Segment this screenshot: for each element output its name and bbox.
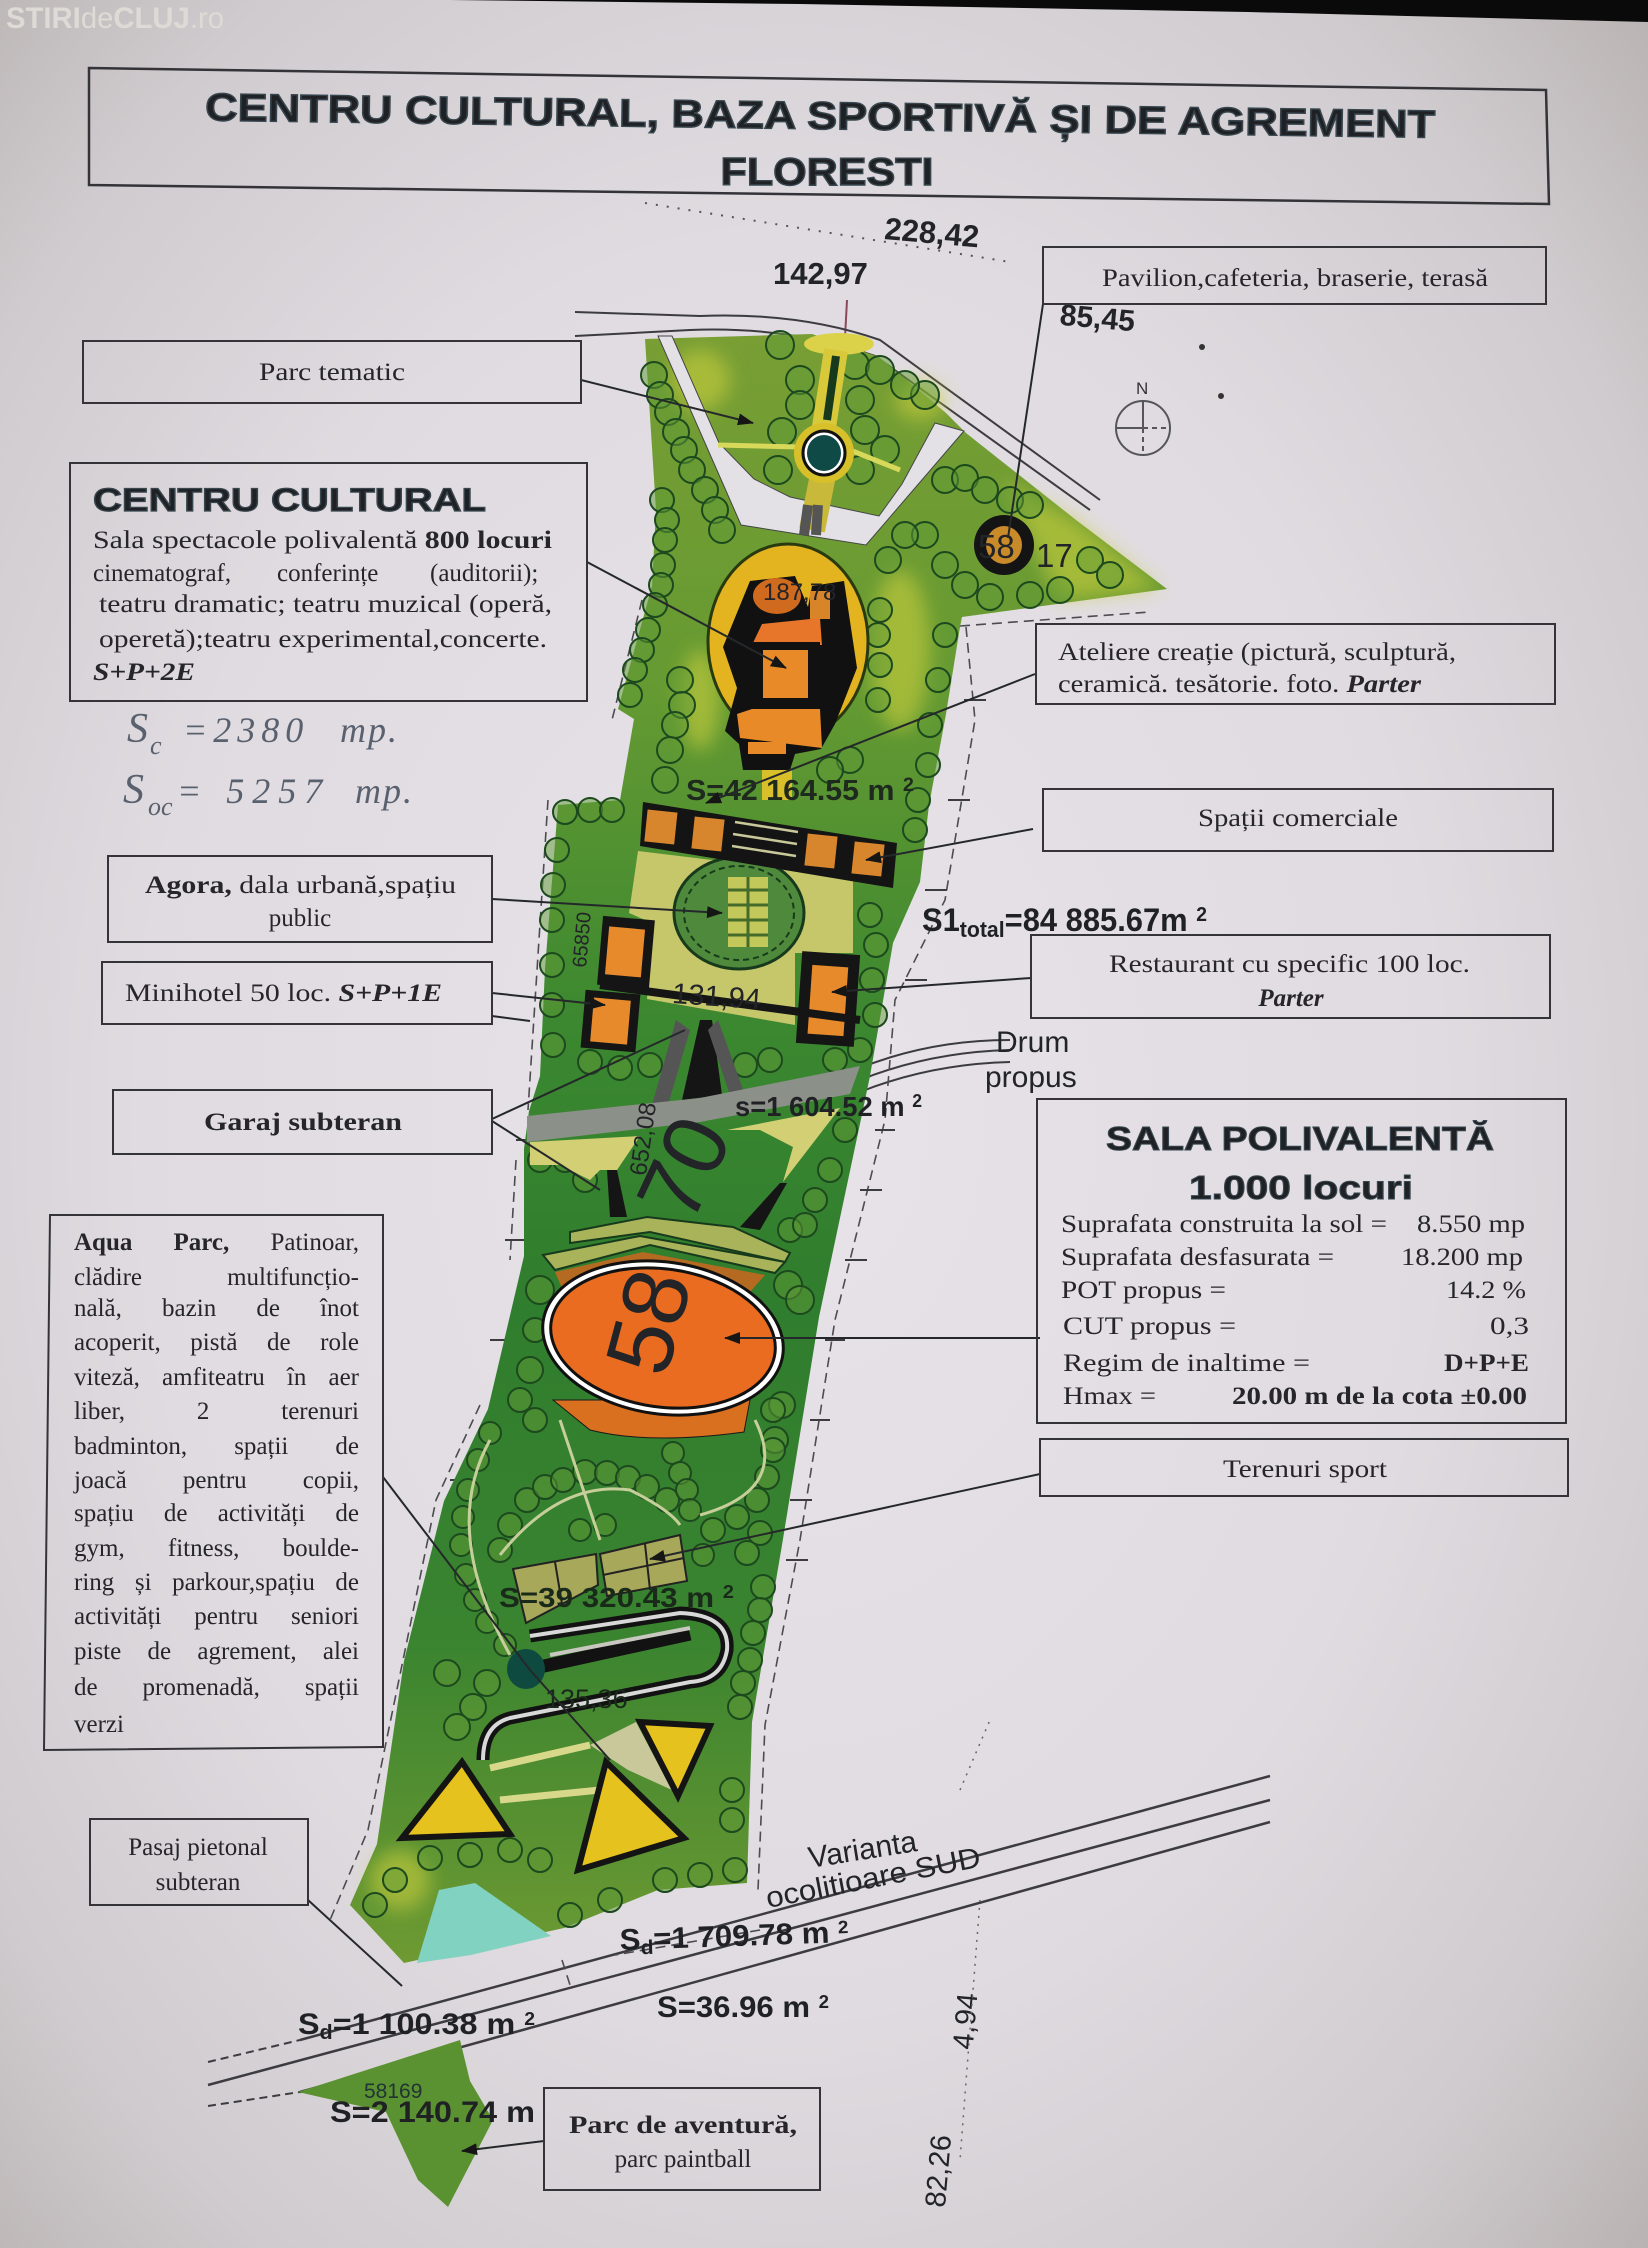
label: Garaj subteran: Garaj subteran [204,1109,402,1136]
cultural centre building [708,544,868,800]
plot area labels: 58169 [364,2080,422,2103]
text: viteză, amfiteatru în aer [74,1364,359,1391]
panel: Centru Cultural: cinematograf, [93,560,231,587]
title: FLORESTI [720,151,934,194]
text: gym, fitness, boulde- [74,1535,359,1562]
label: Pavilion: Pavilion,cafeteria, braserie, terasă [1102,265,1488,292]
plot area labels: 2 [723,1582,734,1602]
pavilion round building: 58 [978,528,1015,565]
teal dot [507,1649,545,1689]
label: Garaj subteran [113,1090,492,1154]
leader lines [308,304,1043,2151]
road labels: 4,94 [948,1992,984,2051]
plot area labels: =1 709.78 m [653,1916,839,1956]
panel: Sala polivalentă: Suprafata desfasurata = [1061,1244,1334,1271]
plot area labels: 2 [838,1917,849,1937]
text block: Aqua Parc description [73,1229,359,1738]
road labels: propus [985,1061,1077,1094]
handwritten note: S [127,706,148,752]
plot area labels: total [960,917,1005,942]
sports hall: 652,08 [625,1101,662,1177]
plot area labels: 2 [912,1091,922,1111]
panel: Centru Cultural: Sala spectacole polivalentă 800 locuri [93,527,552,554]
road labels: Varianta [806,1825,920,1875]
label: Terenuri sport [1040,1439,1568,1496]
plot area labels: d [320,2022,333,2044]
site dimension labels [645,203,1136,338]
label: Pasaj pietonal: subteran [156,1869,241,1896]
text: acoperit, pistă de role [74,1329,359,1356]
panel: Centru Cultural: teatru dramatic; teatru muzical (operă, [99,591,552,618]
agora plaza [569,802,897,1052]
proposed road band [527,1020,860,1230]
text: Aqua Parc, Patinoar, [74,1229,359,1256]
plot area labels: S=36.96 m [657,1991,805,2024]
text: clădire multifuncțio- [74,1264,359,1291]
label: Restaurant: Parter [1257,985,1324,1012]
title: CENTRU CULTURAL, BAZA SPORTIVĂ ȘI DE AGREMENT [205,85,1436,147]
restaurant block [796,951,860,1047]
handwritten note: mp. [340,710,399,750]
text: piste de agrement, alei [74,1638,359,1665]
panel: Sala polivalentă: 0,3 [1490,1313,1529,1340]
label: Pavilion [1043,247,1546,304]
road labels: Drum [996,1026,1069,1059]
label: Ateliere [1036,624,1555,704]
label: Pasaj pietonal [90,1819,308,1905]
agora plaza: 65850 [569,911,596,968]
handwritten note: mp. [355,771,414,811]
plot area labels: 2 [903,775,914,796]
label: Parc de aventură: Parc de aventură, [569,2112,797,2139]
label: Parc de aventură [544,2088,820,2190]
panel: Centru Cultural: S+P+2E [93,659,195,686]
label: Parc tematic: Parc tematic [259,359,405,386]
plot area labels: =1 100.38 m [333,2008,524,2041]
agora plaza: 131,94 [671,978,762,1016]
plot area labels: =84 885.67m [1005,902,1196,938]
road lines [208,312,1270,2106]
panel: Aqua Parc box [44,1215,383,1750]
label: Agora: public [269,905,331,932]
label: Restaurant: Restaurant cu specific 100 loc. [1109,951,1470,978]
sports hall [533,1101,793,1438]
panel: Centru Cultural: conferințe [277,560,378,587]
panel: Sala polivalentă: Hmax = [1063,1383,1156,1410]
site dimension labels: 142,97 [773,256,868,291]
label: Minihotel [102,962,492,1024]
handwritten note: S [123,767,144,813]
panel: Sala polivalentă: 18.200 mp [1401,1244,1523,1271]
plot area labels: 135,36 [545,1684,628,1714]
watermark: STIRIdeCLUJ.ro [6,2,224,35]
text: nală, bazin de înot [74,1295,359,1322]
panel: Sala polivalentă: 8.550 mp [1417,1211,1525,1238]
plot area labels: s=1 604.52 m [735,1091,909,1122]
label: Ateliere: ceramică. tesătorie. foto. Parter [1058,671,1421,698]
panel: Sala polivalentă: SALA POLIVALENTĂ [1106,1120,1494,1157]
label: Spații comerciale [1043,789,1553,851]
sports hall: 58 [587,1259,712,1385]
label: Parc tematic [83,341,581,403]
light panel [590,1722,672,1790]
pavilion round building: 17 [1036,537,1073,574]
handwritten note: c [150,731,162,760]
minihotel blocks [597,916,655,989]
plot area labels: S1 [922,902,961,938]
icon: north compass: N [1136,379,1148,398]
title [89,68,1549,204]
panel: Centru Cultural: CENTRU CULTURAL [93,482,486,518]
plot area labels: 2 [524,2009,535,2029]
pavilion round building [974,515,1073,575]
sport courts [513,1535,687,1623]
panel: Centru Cultural: operetă);teatru experimental,concerte. [99,626,547,653]
plot area labels: S=42 164.55 m [686,775,885,807]
site dimension labels: 228,42 [883,211,981,254]
label: Restaurant [1031,935,1550,1018]
commercial row [640,802,897,888]
plot area labels: 2 [1196,904,1207,926]
fountain avenue [718,333,900,535]
panel: Sala polivalentă: Regim de inaltime = [1063,1350,1310,1377]
handwritten note [123,706,414,821]
label: Agora [108,856,492,942]
cultural centre building: 187,78 [763,579,836,606]
site plan [208,312,1270,2207]
yellow patches [370,350,1160,1910]
text: spațiu de activități de [74,1500,359,1527]
plot area labels: d [640,1937,654,1959]
label: Agora: Agora, dala urbană,spațiu [145,872,457,899]
label: Terenuri sport: Terenuri sport [1223,1456,1387,1483]
road labels: 82,26 [920,2134,958,2209]
text: liber, 2 terenuri [74,1398,359,1425]
text: joacă pentru copii, [74,1467,359,1494]
road labels: ocolitioare SUD [763,1842,983,1915]
road labels [763,1026,1077,2209]
panel: Sala polivalentă: Suprafata construita la sol = [1061,1211,1387,1238]
panel: Sala polivalentă: 1.000 locuri [1189,1169,1413,1206]
site dimension labels: 85,45 [1059,299,1136,338]
south parcel [298,2040,493,2207]
panel: Centru Cultural [70,463,587,701]
panel: Sala polivalentă [1037,1099,1566,1423]
panel: Centru Cultural: (auditorii); [430,560,538,587]
handwritten note: = 5257 [177,771,330,811]
label: Spații comerciale: Spații comerciale [1198,805,1398,832]
yellow triangles [402,1722,710,1870]
label: Ateliere: Ateliere creație (pictură, sculptură, [1058,639,1456,666]
text: de promenadă, spații [74,1674,359,1701]
label: Parc de aventură: parc paintball [615,2146,751,2173]
label: Minihotel: Minihotel 50 loc. S+P+1E [125,980,442,1007]
dashed boundary offsets [330,600,1150,1985]
plot area labels: S=39 320.43 m [499,1582,691,1613]
icon: north compass [1116,344,1224,456]
text: activități pentru seniori [74,1603,359,1630]
panel: Sala polivalentă: 20.00 m de la cota ±0.00 [1232,1383,1527,1410]
handwritten note: oc [148,792,173,821]
panel: Sala polivalentă: 14.2 % [1446,1277,1526,1304]
plot area labels: S=2 140.74 m [330,2096,535,2129]
pond [417,1883,551,1963]
light garden paths [469,1420,765,1655]
text: verzi [74,1711,124,1738]
green land [350,334,1167,1963]
tree symbols [363,331,1123,1927]
plot area labels: S [619,1923,640,1957]
white paths [658,336,964,545]
running track [483,1613,727,1800]
panel: Sala polivalentă: D+P+E [1444,1350,1529,1377]
plot area labels: 2 [819,1992,829,2012]
plot area labels: S [298,2008,318,2041]
label: Pasaj pietonal: Pasaj pietonal [128,1834,268,1861]
panel: Sala polivalentă: CUT propus = [1063,1313,1236,1340]
plot area labels [298,775,1207,2129]
handwritten note: =2380 [183,710,309,750]
text: ring și parkour,spațiu de [74,1569,359,1596]
sports hall: 70 [618,1102,751,1235]
text: badminton, spații de [74,1433,359,1460]
panel: Sala polivalentă: POT propus = [1061,1277,1226,1304]
